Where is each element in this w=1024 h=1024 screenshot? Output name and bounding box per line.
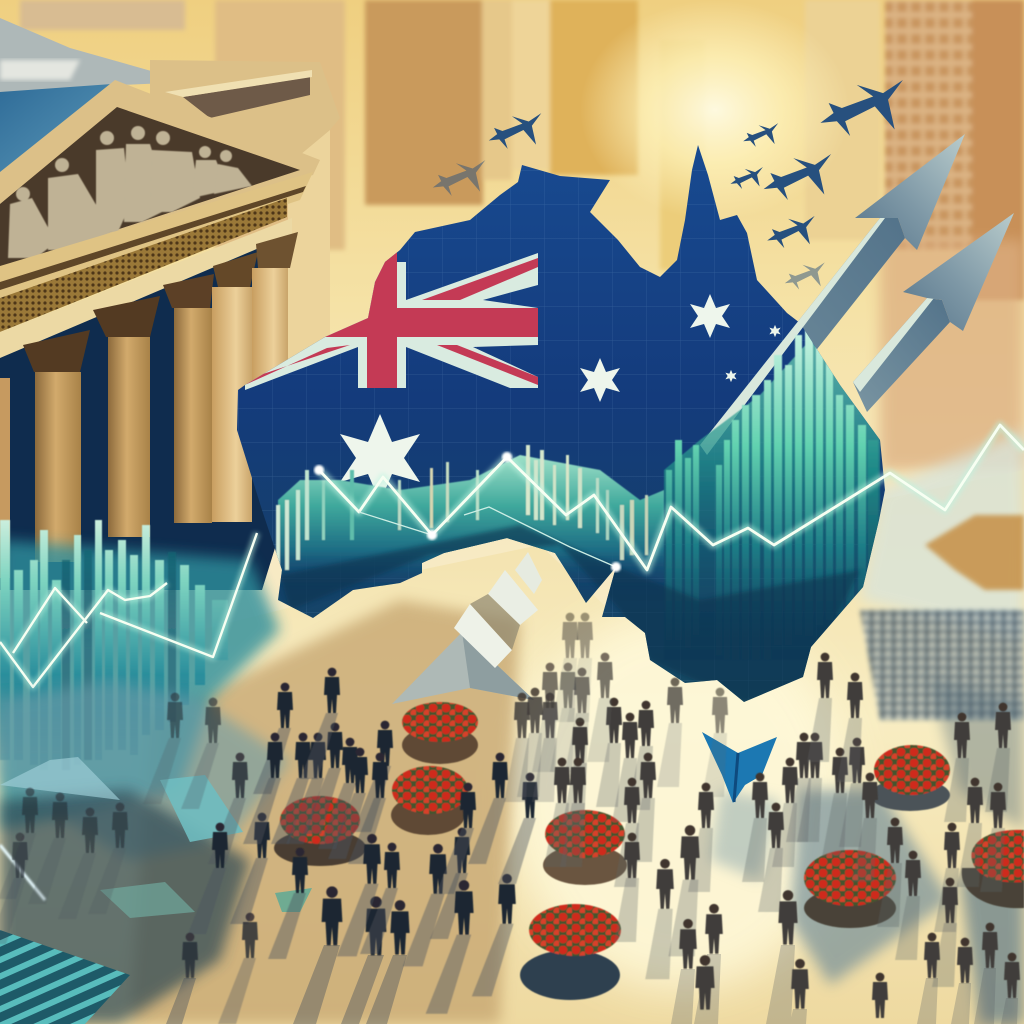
rising arrow front [853, 213, 1014, 412]
blue plaza reflections [710, 790, 1024, 1024]
green bar chart left [0, 520, 228, 770]
column 2 [93, 296, 160, 537]
panel [100, 882, 195, 918]
sunburst [580, 0, 850, 220]
statue [214, 150, 252, 194]
tan ground lower left [130, 600, 520, 1024]
map of Australia with flag [230, 140, 890, 710]
balustrade wing [150, 60, 340, 165]
lower band [0, 218, 292, 358]
star large [340, 414, 420, 502]
planter [543, 810, 627, 885]
building roof [0, 84, 112, 174]
star right top [690, 294, 730, 338]
small panel [275, 888, 312, 912]
crowd left [0, 668, 393, 1024]
striped panel [0, 930, 130, 1024]
planter [870, 745, 950, 811]
pediment statues [8, 126, 252, 258]
jet [489, 113, 541, 149]
glow streak [0, 845, 45, 900]
bright plaza glow [510, 610, 850, 990]
classical building [0, 18, 340, 590]
planter [274, 796, 366, 866]
tent [392, 552, 542, 704]
jet large [820, 80, 903, 136]
left backdrop haze [0, 540, 280, 830]
panel [0, 757, 120, 800]
right wall [288, 130, 330, 380]
dark city reflection in lower map [280, 525, 860, 702]
right faded buildings [880, 240, 1024, 470]
bus on right [925, 515, 1024, 590]
column 1 [23, 330, 90, 562]
right misty glass panels [860, 430, 1024, 830]
bright panel [160, 775, 243, 842]
glass data panels bottom left [0, 680, 312, 1024]
column 4 [212, 252, 258, 522]
green bar chart centre [276, 445, 664, 600]
map silhouette [237, 145, 885, 702]
plaza ground [0, 470, 1024, 1024]
jet faded [785, 262, 825, 290]
bottom edge shadows right [671, 945, 1018, 1024]
planter [962, 830, 1024, 908]
star right lower [580, 358, 620, 402]
tympanum [0, 107, 300, 268]
jet [767, 216, 815, 248]
star small lower [725, 370, 737, 382]
jet faded [433, 160, 485, 196]
blue butterfly [702, 732, 777, 803]
white line chart main [314, 425, 1024, 572]
frieze [0, 198, 287, 332]
statue [96, 131, 130, 232]
jets [433, 80, 903, 290]
jet [743, 123, 778, 147]
map grid [230, 140, 890, 710]
crowd centre [504, 613, 728, 942]
white roof highlight [0, 60, 80, 80]
rising arrow back head [700, 134, 965, 455]
crowd right centre [645, 653, 921, 1010]
star small upper [769, 325, 781, 337]
pediment cornice [0, 80, 320, 270]
planter [520, 904, 621, 1000]
statue [8, 187, 56, 258]
column 3 [163, 274, 214, 523]
partial column left [0, 378, 10, 578]
planters [274, 702, 1024, 1000]
jet [764, 154, 831, 200]
lower cornice [0, 172, 313, 298]
planter [402, 702, 478, 764]
background skyscrapers [20, 0, 1024, 300]
jet [730, 167, 763, 189]
statue [150, 131, 200, 212]
dark lower left [0, 790, 250, 1024]
flag union jack [245, 250, 538, 390]
planter [391, 766, 468, 835]
green bar chart right [664, 316, 880, 660]
planter [804, 850, 896, 928]
pale upper roofline [0, 18, 190, 100]
statue [48, 158, 112, 250]
rising arrow back shaft behind map [700, 218, 905, 478]
crowd centre bottom [322, 753, 538, 1014]
crowd of people [0, 613, 1020, 1024]
white line chart left [0, 533, 257, 687]
dark portico interior [0, 225, 300, 590]
column 5 [252, 232, 298, 383]
bottom edge shadows [166, 945, 407, 1024]
glass haze [0, 680, 290, 860]
crowd far right [872, 703, 1020, 1018]
statue [124, 126, 170, 222]
statue [192, 146, 228, 198]
